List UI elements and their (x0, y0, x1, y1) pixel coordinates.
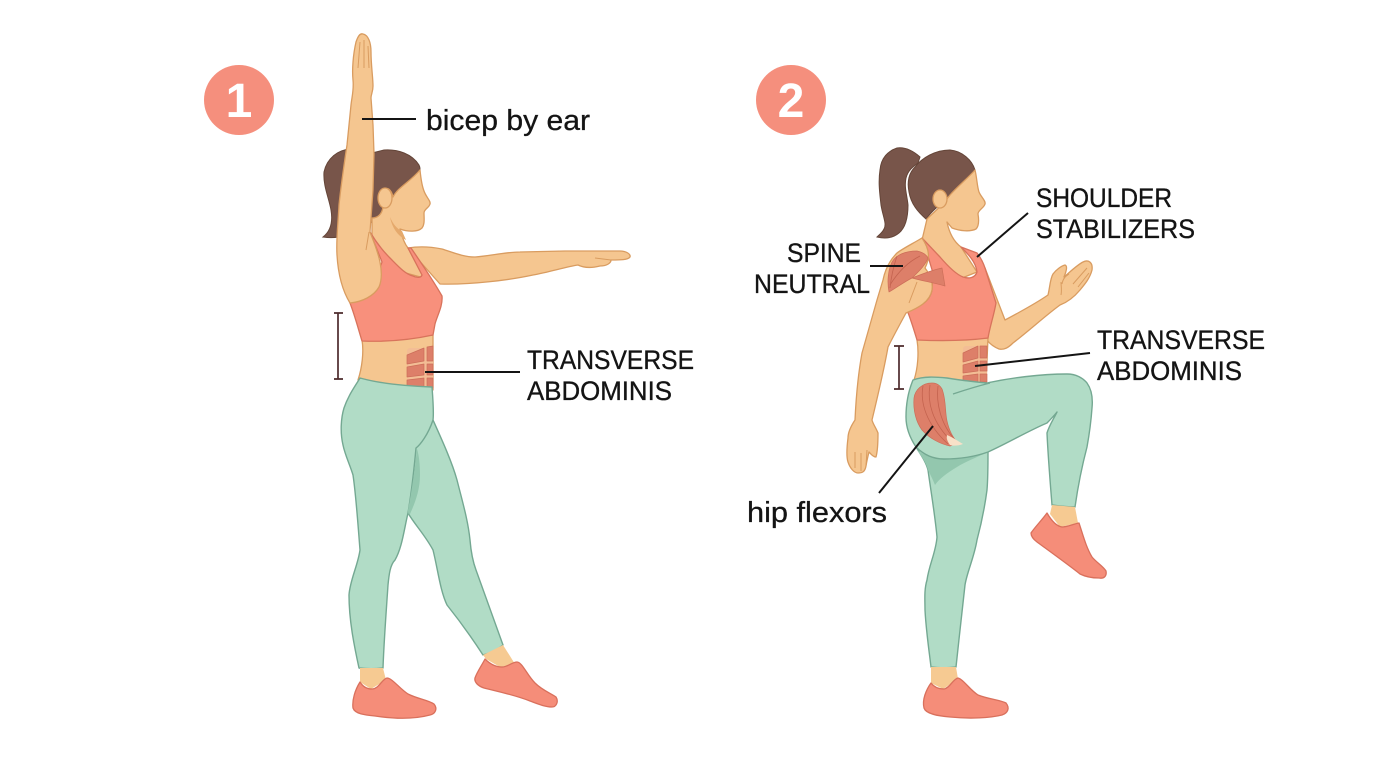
standing leg, figure 2 (916, 430, 988, 668)
label: transverse abdominis, figure 2: TRANSVERSE (1097, 325, 1265, 355)
hair, figure 2 (908, 150, 975, 219)
label: bicep by ear: bicep by ear (426, 105, 590, 137)
ear, figure 1 (378, 188, 392, 208)
midriff, figure 1 (358, 335, 433, 390)
standing shoe, figure 2 (923, 678, 1008, 718)
label: spine neutral (754, 238, 903, 299)
step 2 badge (756, 65, 826, 135)
abdominal muscle, figure 2 (963, 346, 987, 382)
rear shoe, figure 1 (475, 659, 557, 707)
rear arm and shoulder, figure 2 (847, 238, 932, 473)
figure 1: standing with arm raised (323, 34, 630, 718)
raised shoe, figure 2 (1031, 513, 1106, 578)
extended hand finger line, figure 1 (595, 258, 611, 260)
label: spine neutral: NEUTRAL (754, 269, 870, 299)
shoulder muscles, figure 2 (888, 251, 945, 292)
sports top, figure 2 (907, 238, 996, 341)
step 1 badge (204, 65, 274, 135)
waist bracket, figure 2 (894, 346, 904, 389)
back leg, figure 1 (408, 420, 503, 655)
inner thigh shading, figure 2 (917, 450, 988, 485)
sock, figure 1 rear (483, 645, 515, 667)
label: hip flexors (747, 426, 933, 529)
sock, figure 2 standing foot (931, 667, 958, 689)
lowered hand finger lines, figure 2 (855, 282, 917, 471)
label: transverse abdominis, figure 2 (975, 325, 1265, 386)
raised hand finger lines and arm crease, figure 1 (358, 40, 369, 250)
label: transverse abdominis, figure 1: ABDOMINIS (527, 376, 672, 406)
hip flexor muscle, figure 2 (914, 383, 963, 446)
ear, figure 2 (933, 190, 947, 208)
ponytail, figure 2 (877, 148, 920, 238)
label: shoulder stabilizers: SHOULDER (1036, 183, 1172, 213)
hair, figure 1 (323, 149, 420, 238)
front leg, figure 1 (341, 378, 433, 669)
inner thigh shading, figure 1 (408, 449, 420, 514)
label: transverse abdominis, figure 1 (425, 345, 694, 406)
label: shoulder stabilizers: STABILIZERS (1036, 214, 1195, 244)
sports top, figure 1 (350, 232, 442, 341)
label: transverse abdominis, figure 2: ABDOMINIS (1097, 356, 1242, 386)
midriff, figure 2 (914, 338, 988, 384)
step 2 badge: 2 (778, 75, 804, 128)
extended arm, figure 1 (408, 247, 630, 284)
label: spine neutral: SPINE (787, 238, 861, 268)
head and neck, figure 1 (372, 170, 430, 278)
raised forearm and hand, figure 2 (985, 261, 1092, 349)
raised hand finger lines, figure 2 (1061, 268, 1089, 295)
thigh contour line, figure 2 (953, 383, 990, 394)
raised thigh and shin, figure 2 (906, 374, 1092, 507)
waist bracket, figure 1 (334, 313, 343, 379)
sock, figure 2 raised foot (1050, 505, 1078, 527)
abdominal muscle, figure 1 (407, 346, 433, 388)
label: shoulder stabilizers (977, 183, 1195, 257)
label: transverse abdominis, figure 1: TRANSVERSE (527, 345, 694, 375)
front shoe, figure 1 (353, 678, 436, 718)
neck shadow, figure 1 (390, 217, 406, 240)
head and neck, figure 2 (922, 170, 985, 278)
raised arm, figure 1 (337, 34, 381, 303)
figure 2: knee raised (847, 148, 1106, 718)
step 1 badge: 1 (226, 75, 252, 128)
sock, figure 1 front (360, 668, 386, 689)
label: hip flexors: hip flexors (747, 497, 887, 529)
